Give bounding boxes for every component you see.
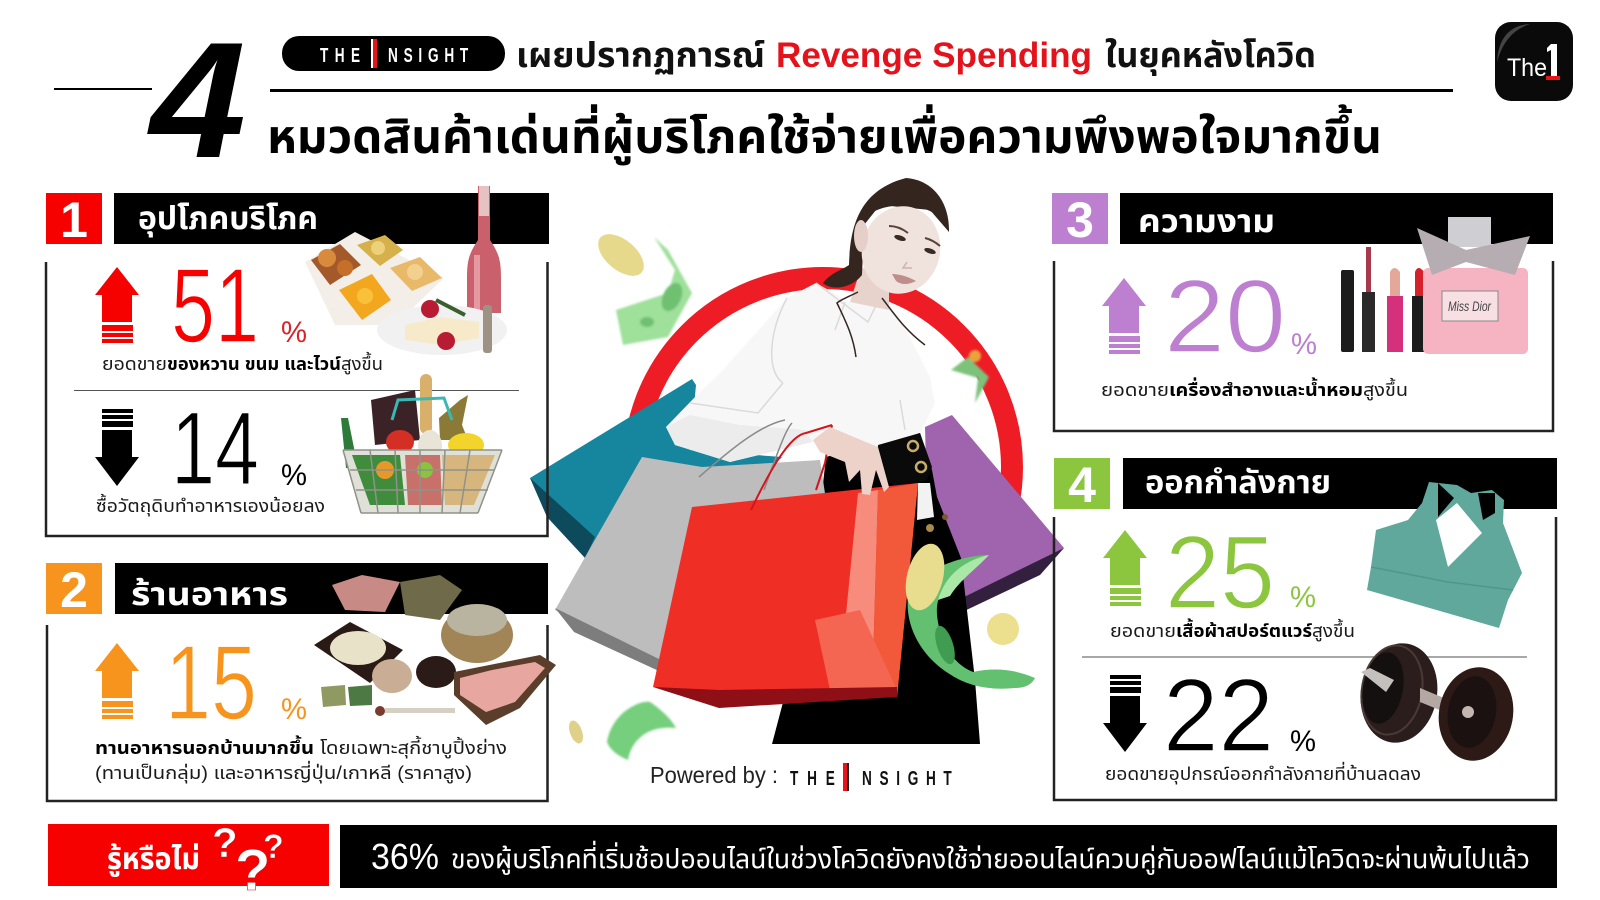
stat: up 51 percent: % xyxy=(281,316,307,349)
powered by credit: Powered by : xyxy=(650,762,778,788)
caption: cosmetics sales up: ยอดขาย xyxy=(1101,380,1169,400)
stat: down 14 percent: % xyxy=(281,459,307,492)
panel 4 header: 4 xyxy=(1068,457,1096,513)
caption: sportswear up xyxy=(1110,618,1355,643)
big green bill xyxy=(908,555,1035,689)
central illustration: woman with shopping bags xyxy=(530,178,1064,760)
panel 3 header: ความงาม xyxy=(1138,203,1275,239)
stat: up 20 percent: 20 xyxy=(1164,259,1286,375)
caption: eating out: (ทานเป็นกลุ่ม) และอาหารญี่ปุ่น/เกาหลี (ราคาสูง) xyxy=(95,760,472,785)
panel 3: beauty xyxy=(1052,192,1553,431)
headline line 1: เผยปรากฏการณ์ xyxy=(516,36,765,75)
did you know label: ? xyxy=(212,819,238,866)
shirt xyxy=(666,283,935,520)
hand xyxy=(813,427,889,495)
stat: up 20 percent: % xyxy=(1291,328,1317,361)
panel 1 header xyxy=(46,192,549,248)
stat: up 25 percent: 25 xyxy=(1165,515,1275,631)
gray bag xyxy=(555,457,835,680)
stat: up 15 percent: 15 xyxy=(165,624,257,742)
icon: sports bra xyxy=(1367,482,1522,628)
teal bag xyxy=(530,379,792,560)
icon: wine bottle xyxy=(467,186,501,313)
caption: sales up: สูงขึ้น xyxy=(341,351,383,376)
brand pill: The 1 Insight xyxy=(282,36,505,71)
icon: grocery basket xyxy=(341,374,502,513)
headline line 2: หมวดสินค้าเด่นที่ผู้บริโภคใช้จ่ายเพื่อความพึงพอใจมากขึ้น xyxy=(267,104,1382,165)
brand pill: The 1 Insight: THE xyxy=(320,44,360,67)
panel 1 header: อุปโภคบริโภค xyxy=(138,200,318,237)
caption: home equipment down: ยอดขายอุปกรณ์ออกกำลังกายที่บ้านลดลง xyxy=(1105,761,1421,785)
stat: up 20 percent xyxy=(1102,259,1317,375)
stat: up 25 percent: % xyxy=(1290,581,1316,614)
powered by credit: THE xyxy=(790,767,835,790)
panel 2 header xyxy=(46,562,548,618)
icon: Japanese food set xyxy=(314,575,556,725)
panel 3 header xyxy=(1052,192,1553,248)
caption: eating out: ทานอาหารนอกบ้านมากขึ้น xyxy=(95,735,314,758)
stat: down 22 percent: % xyxy=(1290,725,1316,758)
did you know label xyxy=(48,819,329,900)
did you know label: รู้หรือไม่ xyxy=(107,843,200,877)
panel 2 header: 2 xyxy=(60,562,88,618)
caption: sportswear up: เสื้อผ้าสปอร์ตแวร์ xyxy=(1176,618,1312,641)
panel 1: consumer goods xyxy=(46,186,549,536)
icon: perfume bottle: Miss Dior xyxy=(1448,298,1492,314)
stat: up 51 percent: 51 xyxy=(171,247,259,365)
stat: up 25 percent xyxy=(1103,515,1316,631)
caption: cosmetics sales up: เครื่องสำอางและน้ำหอม xyxy=(1169,377,1363,400)
panel 4 header: ออกกำลังกาย xyxy=(1145,464,1331,500)
did you know fact bar: 36% xyxy=(371,836,439,877)
caption: eating out xyxy=(95,735,507,785)
black skirt xyxy=(772,433,980,744)
logo: The 1 xyxy=(1495,22,1573,101)
did you know fact bar xyxy=(340,825,1557,888)
stat: down 22 percent: 22 xyxy=(1163,658,1274,774)
caption: sportswear up: ยอดขาย xyxy=(1110,621,1176,641)
caption: sales up xyxy=(102,351,383,376)
icon: snack trays xyxy=(305,232,444,325)
caption: sportswear up: สูงขึ้น xyxy=(1312,618,1355,643)
panel 1 header: 1 xyxy=(60,192,88,248)
icon: dumbbell xyxy=(1353,637,1521,767)
stat: up 15 percent xyxy=(95,624,307,742)
panel 4: exercise xyxy=(1054,457,1557,800)
bag handles xyxy=(699,420,792,490)
big number 4: 4 xyxy=(147,8,246,192)
brand pill: The 1 Insight: NSIGHT xyxy=(388,44,469,67)
belt eyelets xyxy=(878,433,948,532)
stat: up 15 percent: % xyxy=(281,693,307,726)
did you know fact bar: ของผู้บริโภคที่เริ่มช้อปออนไลน์ในช่วงโควิดยังคงใช้จ่ายออนไลน์ควบคู่กับออฟไลน์แม้โควิดจะผ่านพ้นไปแล้ว xyxy=(451,840,1530,875)
title block xyxy=(54,8,1453,192)
panel 4 header xyxy=(1054,457,1557,513)
flying bills xyxy=(607,237,989,760)
panel 3 header: 3 xyxy=(1066,192,1094,248)
panel 2: restaurants xyxy=(46,562,556,801)
powered by credit xyxy=(650,762,952,791)
head xyxy=(823,178,949,357)
headline line 1: ในยุคหลังโควิด xyxy=(1105,36,1316,76)
stat: down 14 percent: 14 xyxy=(171,391,259,507)
icon: perfume bottle xyxy=(1417,217,1530,354)
caption: sales up: ยอดขาย xyxy=(102,354,167,374)
icon: cheesecake plate xyxy=(377,300,507,355)
red ring xyxy=(634,278,1012,656)
caption: cosmetics sales up: สูงขึ้น xyxy=(1363,377,1408,402)
headline line 1 xyxy=(516,36,1316,76)
powered by credit: NSIGHT xyxy=(862,767,952,790)
icon: cosmetics xyxy=(1341,247,1429,352)
caption: sales up: ของหวาน ขนม และไวน์ xyxy=(167,354,341,374)
stat: down 14 percent xyxy=(95,391,307,507)
logo: The 1: The xyxy=(1507,54,1547,82)
headline line 1: Revenge Spending xyxy=(776,36,1092,75)
coins xyxy=(566,226,1019,745)
did you know label: ? xyxy=(263,828,284,866)
purple bag xyxy=(925,415,1064,614)
caption: raw ingredients down: ซื้อวัตถุดิบทำอาหารเองน้อยลง xyxy=(96,493,325,517)
caption: cosmetics sales up xyxy=(1101,377,1408,402)
panel 2 header: ร้านอาหาร xyxy=(131,576,288,612)
stat: down 22 percent xyxy=(1103,658,1316,774)
red bag xyxy=(653,425,918,708)
caption: eating out: โดยเฉพาะสุกี้ชาบูปิ้งย่าง xyxy=(320,735,507,760)
stat: up 51 percent xyxy=(95,247,307,365)
